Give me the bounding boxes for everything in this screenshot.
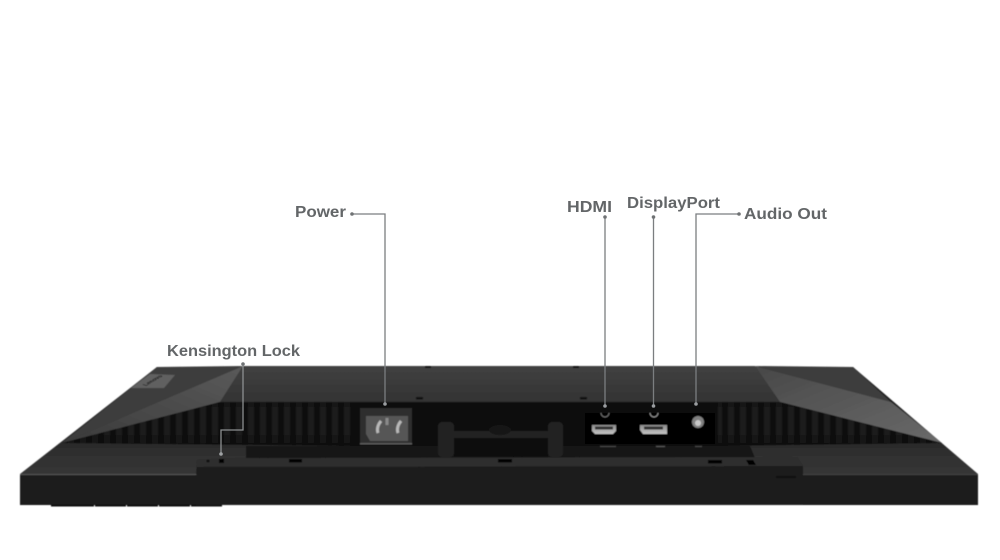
front edge left bbox=[20, 474, 196, 505]
right vents bbox=[716, 402, 942, 446]
stand bar bbox=[196, 457, 803, 476]
callout: DisplayPort: DisplayPort bbox=[627, 195, 720, 212]
front edge centre bbox=[196, 476, 803, 505]
callout: DisplayPort bbox=[627, 195, 720, 408]
audio jack bbox=[692, 416, 704, 447]
callout: Audio Out bbox=[694, 206, 827, 406]
left vent shading bbox=[62, 402, 358, 446]
right vent shading bbox=[716, 402, 942, 446]
callout: HDMI: HDMI bbox=[567, 199, 612, 216]
screw holes bbox=[416, 366, 587, 400]
infographic: monitor rear ports bbox=[19, 196, 979, 508]
HDMI port bbox=[592, 413, 616, 447]
port panel bbox=[585, 413, 715, 444]
right inner wing bbox=[755, 366, 942, 443]
centre recess bbox=[356, 402, 718, 446]
callout: Kensington Lock bbox=[167, 343, 300, 456]
foot bbox=[776, 476, 796, 478]
callout: Kensington Lock: Kensington Lock bbox=[167, 343, 300, 360]
upper centre panel bbox=[220, 366, 780, 402]
logo plate bbox=[131, 374, 175, 388]
callout: Audio Out: Audio Out bbox=[744, 206, 827, 223]
lower rear surface bbox=[20, 367, 978, 474]
left outer wing bbox=[62, 366, 243, 443]
DisplayPort port bbox=[640, 413, 667, 447]
logo plate: Lenovo bbox=[142, 375, 165, 387]
lower recess step bbox=[246, 446, 755, 458]
callout: HDMI bbox=[567, 199, 612, 408]
front edge right bbox=[803, 474, 978, 505]
callout: Power: Power bbox=[295, 204, 346, 221]
monitor rear bbox=[20, 366, 978, 506]
edge highlight bbox=[20, 474, 196, 475]
power socket bbox=[360, 408, 412, 444]
stand hinge bbox=[438, 422, 563, 457]
right outer wing bbox=[755, 366, 891, 402]
left vents bbox=[62, 402, 358, 446]
left inner wing bbox=[62, 366, 243, 443]
callout: Power bbox=[295, 204, 387, 406]
bottom feet bbox=[51, 505, 222, 506]
